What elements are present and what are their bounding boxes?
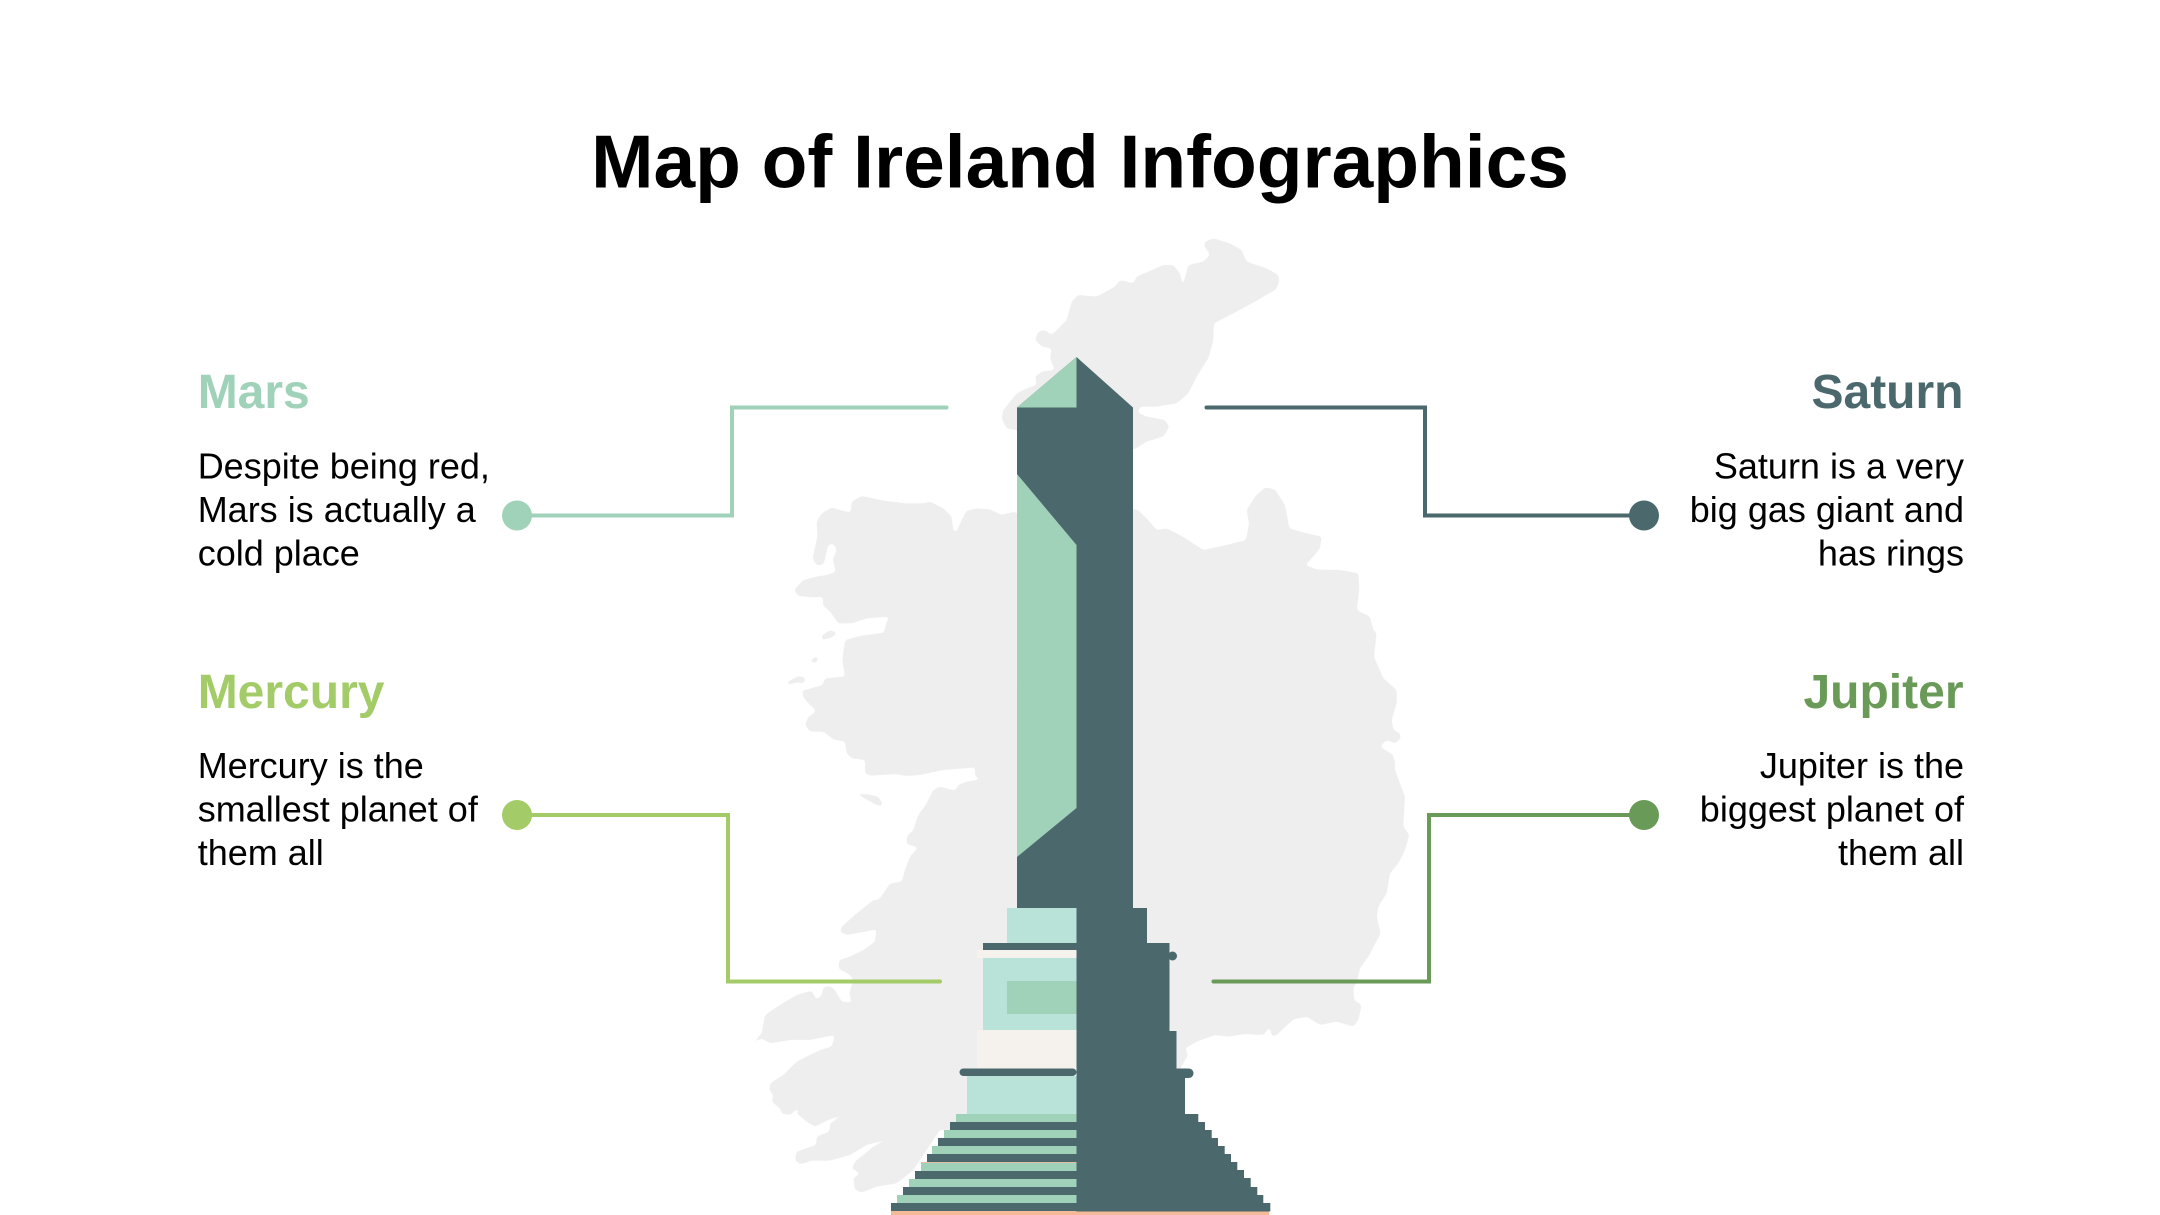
- text: Jupiter description: them all: [1838, 832, 1964, 873]
- tower shaft: [1017, 357, 1133, 908]
- text: Jupiter description: biggest planet of: [1700, 788, 1965, 830]
- heading: Mercury: Mercury: [198, 666, 385, 719]
- panel: Mars: [198, 366, 490, 573]
- text: Saturn description: Saturn is a very: [1714, 446, 1964, 486]
- connector: Saturn: [1206, 408, 1659, 530]
- text: Mercury description: Mercury is the: [198, 745, 424, 786]
- connector: Mars: [502, 408, 946, 530]
- text: Mars description: Mars is actually a: [198, 489, 477, 530]
- panel: Jupiter: [1700, 666, 1965, 873]
- panel: Mercury: [198, 666, 479, 873]
- panel: Saturn: [1690, 366, 1964, 573]
- text: Mercury description: smallest planet of: [198, 788, 479, 830]
- title: Map of Ireland Infographics: [591, 120, 1569, 204]
- heading: Mars: Mars: [198, 366, 310, 419]
- text: Mars description: cold place: [198, 532, 360, 573]
- text: Mercury description: them all: [198, 832, 324, 873]
- tower steps: [891, 1114, 1269, 1215]
- connector: Jupiter: [1214, 800, 1659, 982]
- text: Saturn description: has rings: [1818, 532, 1964, 573]
- tower base dark side: [1076, 908, 1270, 1212]
- map of Ireland silhouette: [750, 238, 1409, 1193]
- heading: Jupiter: Jupiter: [1803, 666, 1964, 719]
- text: Jupiter description: Jupiter is the: [1760, 745, 1964, 786]
- connector: Mercury: [502, 800, 940, 982]
- monument tower: [891, 357, 1270, 1215]
- heading: Saturn: Saturn: [1811, 366, 1964, 419]
- tower base light side: [960, 908, 1077, 1114]
- text: Saturn description: big gas giant and: [1690, 489, 1964, 530]
- text: Mars description: Despite being red,: [198, 446, 490, 486]
